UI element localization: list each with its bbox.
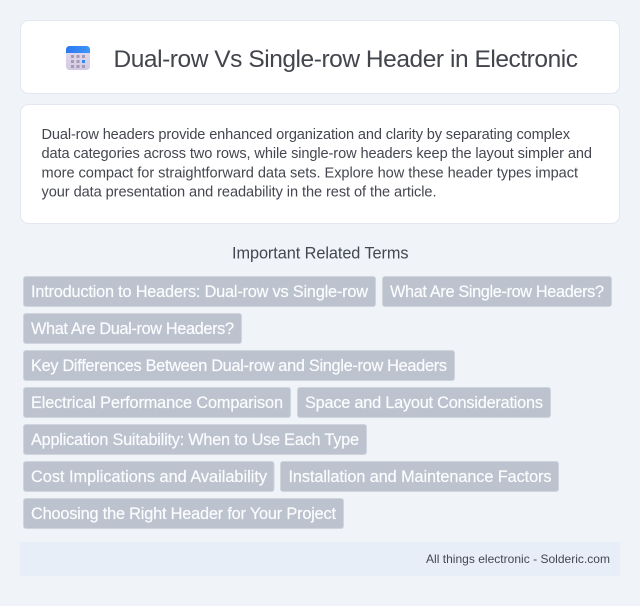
tag: space and layout <box>298 388 550 418</box>
tag: choosing the right header: Choosing the Right Header for Your Project <box>31 505 336 523</box>
tag: key differences <box>24 350 454 380</box>
tag: single-row headers <box>382 276 612 306</box>
tag: installation and maintenance <box>280 462 558 492</box>
tag list: related terms <box>24 276 612 528</box>
text block: introduction <box>42 127 592 200</box>
footer <box>20 542 620 576</box>
tag: introduction <box>24 276 376 306</box>
icon: calendar grid <box>66 46 90 70</box>
tag: space and layout: Space and Layout Considerations <box>305 394 543 412</box>
panel: title header <box>20 20 620 94</box>
tag: dual-row headers <box>24 314 242 344</box>
tag: installation and maintenance: Installation and Maintenance Factors <box>288 468 552 486</box>
tag: key differences: Key Differences Between Dual-row and Single-row Headers <box>31 357 447 375</box>
text block: introduction: Dual-row headers provide enhanced organization and clarity by separating complex <box>42 127 571 143</box>
title: Dual-row Vs Single-row Header in Electronic <box>114 46 578 73</box>
tag: electrical performance: Electrical Performance Comparison <box>31 394 283 412</box>
tag: dual-row headers: What Are Dual-row Headers? <box>31 320 234 338</box>
tag: introduction: Introduction to Headers: Dual-row vs Single-row <box>31 283 368 301</box>
tag: application suitability: Application Suitability: When to Use Each Type <box>31 431 359 449</box>
tag: cost implications <box>24 462 274 492</box>
tag: choosing the right header <box>24 498 344 528</box>
tag: cost implications: Cost Implications and Availability <box>31 468 268 486</box>
tag: application suitability <box>24 424 366 454</box>
footer credit: All things electronic - Solderic.com <box>426 552 610 566</box>
text block: introduction: your data presentation and readability in the rest of the article. <box>42 184 436 200</box>
panel: introduction text <box>20 104 620 224</box>
heading: important related terms: Important Related Terms <box>232 244 408 262</box>
text block: introduction: data categories across two rows, while single-row headers keep the layout simpler and <box>42 146 592 162</box>
text block: introduction: more compact for straightforward data sets. Explore how these header types impact <box>42 166 578 182</box>
tag: single-row headers: What Are Single-row Headers? <box>390 283 604 301</box>
tag: electrical performance <box>24 388 290 418</box>
